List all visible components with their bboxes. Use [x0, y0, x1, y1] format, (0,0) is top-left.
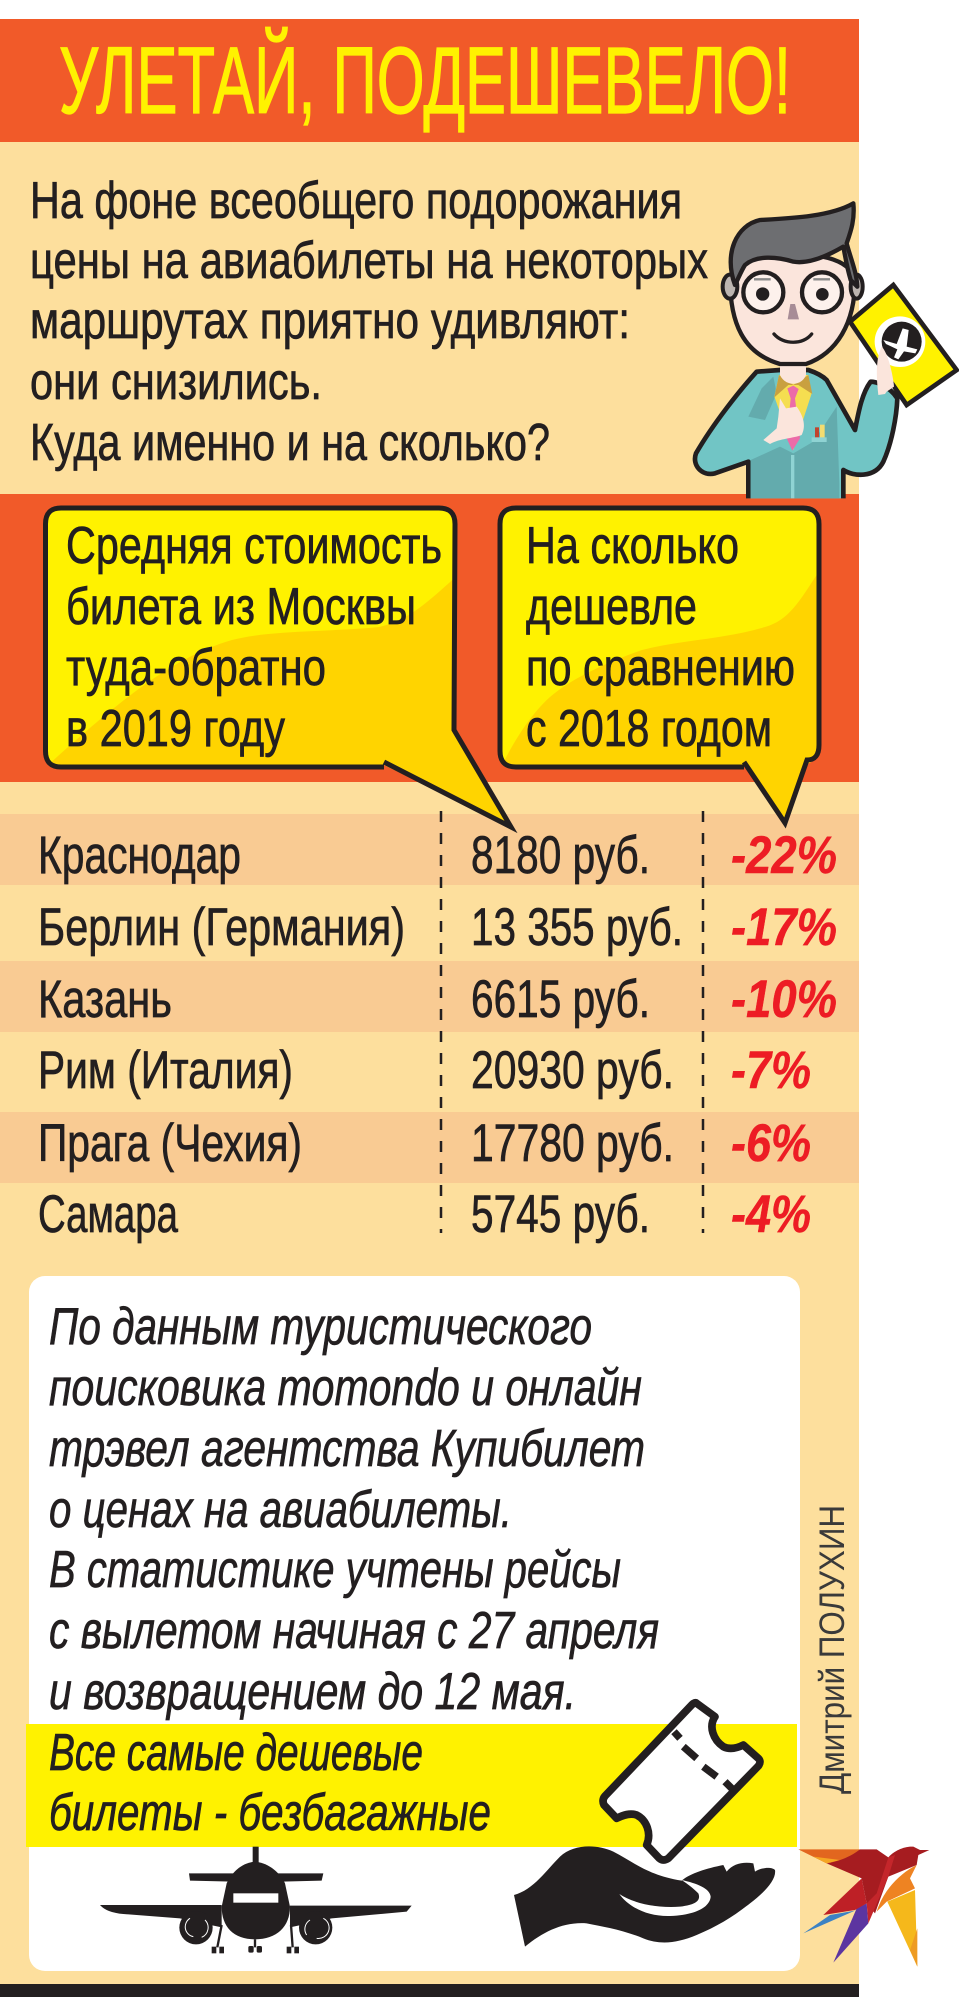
row: Краснодар — [38, 826, 837, 885]
row: Казань — [38, 970, 837, 1029]
nose — [788, 304, 799, 319]
highlight text — [49, 1724, 491, 1842]
intro text: цены на авиабилеты на некоторых — [30, 232, 708, 290]
callout: how much cheaper: по сравнению — [526, 639, 795, 697]
source text: с вылетом начиная с 27 апреля — [49, 1602, 659, 1660]
row: Берлин: -17% — [731, 898, 837, 957]
highlight band — [26, 1724, 797, 1847]
row: Рим — [38, 1041, 811, 1100]
logo: swallow — [798, 1847, 929, 1967]
ears — [723, 275, 737, 299]
row: Краснодар: Краснодар — [38, 826, 241, 885]
neck and head — [780, 357, 806, 384]
pocket pens — [812, 425, 827, 442]
source text: В статистике учтены рейсы — [49, 1541, 621, 1599]
row: Прага: Прага (Чехия) — [38, 1114, 302, 1173]
table rows — [0, 811, 859, 1244]
row: Берлин: Берлин (Германия) — [38, 898, 405, 957]
row: Самара — [38, 1185, 811, 1244]
jacket centre — [751, 407, 839, 498]
callout: how much cheaper: с 2018 годом — [526, 700, 772, 758]
title banner — [0, 19, 859, 142]
row: Прага — [38, 1114, 811, 1173]
callout: average price: билета из Москвы — [66, 578, 416, 636]
illustration: man with ticket — [695, 203, 957, 510]
author credit: Дмитрий ПОЛУХИН — [813, 1505, 852, 1794]
callout: how much cheaper: дешевле — [526, 578, 697, 636]
ticket — [603, 1703, 760, 1860]
row: Рим: 20930 руб. — [471, 1041, 674, 1100]
shirt and collar — [774, 375, 812, 450]
intro text: Куда именно и на сколько? — [30, 414, 550, 472]
hand holding ticket — [877, 347, 894, 395]
source text: и возвращением до 12 мая. — [49, 1663, 576, 1721]
callout: average price: в 2019 году — [66, 700, 285, 758]
icon: hand with ticket — [514, 1703, 775, 1947]
glasses and eyes — [743, 272, 842, 312]
hair — [731, 203, 857, 287]
highlight text: билеты - безбагажные — [49, 1784, 491, 1842]
source text: поисковика momondo и онлайн — [49, 1359, 642, 1417]
callout: average price: туда-обратно — [66, 639, 326, 697]
highlight text: Все самые дешевые — [49, 1724, 423, 1782]
icon: airplane — [100, 1847, 412, 1953]
row: Самара: -4% — [731, 1185, 811, 1244]
callout: average price — [40, 500, 520, 840]
note panel — [26, 1276, 800, 1971]
orange band behind callouts — [0, 494, 859, 782]
smile — [774, 334, 812, 342]
intro text: они снизились. — [30, 353, 322, 411]
callout: average price: Средняя стоимость — [66, 517, 442, 575]
source text: о ценах на авиабилеты. — [49, 1481, 512, 1539]
row: Берлин: 13 355 руб. — [471, 898, 683, 957]
row: Краснодар: -22% — [731, 826, 837, 885]
row: Рим: -7% — [731, 1041, 811, 1100]
intro text: маршрутах приятно удивляют: — [30, 292, 630, 350]
row: Казань: 6615 руб. — [471, 970, 650, 1029]
row: Прага: 17780 руб. — [471, 1114, 674, 1173]
ticket held up — [850, 285, 957, 405]
row: Казань: Казань — [38, 970, 172, 1029]
hand — [514, 1846, 775, 1947]
tie — [787, 386, 800, 451]
row: Казань: -10% — [731, 970, 837, 1029]
row: Самара: Самара — [38, 1185, 178, 1244]
jacket — [695, 370, 897, 510]
row: Краснодар: 8180 руб. — [471, 826, 650, 885]
row: Самара: 5745 руб. — [471, 1185, 650, 1244]
row: Прага: -6% — [731, 1114, 811, 1173]
source text — [49, 1298, 659, 1721]
row: Рим: Рим (Италия) — [38, 1041, 293, 1100]
source text: трэвел агентства Купибилет — [49, 1420, 645, 1478]
callout: how much cheaper: На сколько — [526, 517, 739, 575]
callout: how much cheaper — [495, 500, 825, 830]
source text: По данным туристического — [49, 1298, 592, 1356]
hand on chest — [763, 398, 804, 444]
bottom bar — [0, 1984, 859, 1997]
intro text: На фоне всеобщего подорожания — [30, 172, 682, 230]
intro text — [30, 172, 708, 472]
row: Берлин — [38, 898, 837, 957]
